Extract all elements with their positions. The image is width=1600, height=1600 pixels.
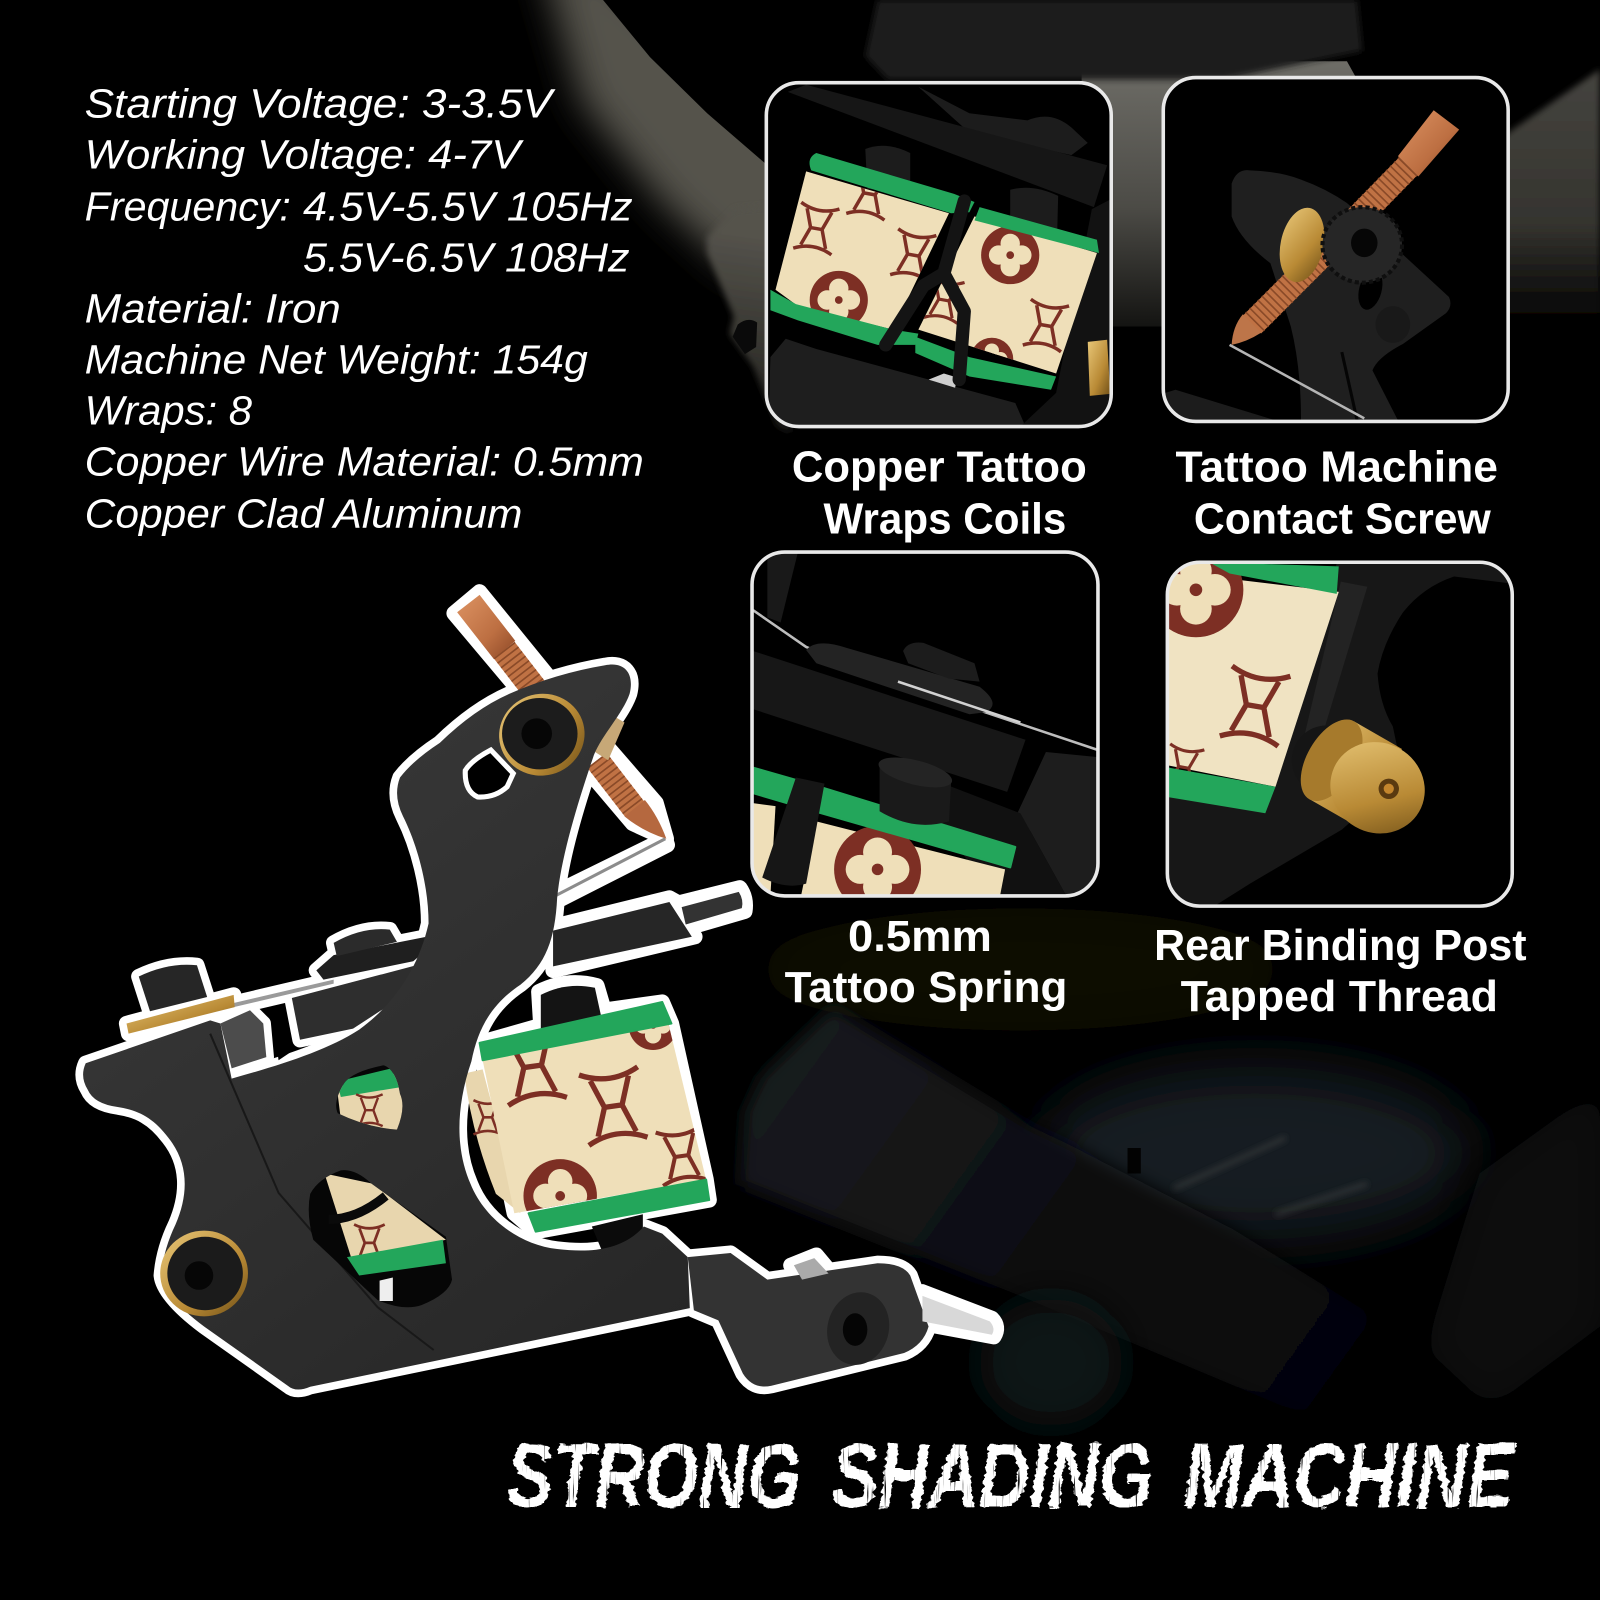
heat-shrink wire <box>886 201 964 380</box>
panel captions: 0.5mm <box>848 912 992 961</box>
armature bar and clamp <box>753 643 1026 792</box>
title: strong shading machine: SHADING <box>832 1425 1153 1527</box>
rear clamp screw and brass washer <box>127 965 266 1068</box>
panel captions: Tattoo Spring <box>785 963 1067 1012</box>
back coil strip <box>464 1069 520 1213</box>
specifications text: Wraps: 8 <box>85 387 252 433</box>
specifications text: 5.5V-6.5V 108Hz <box>303 234 630 280</box>
specifications text: Working Voltage: 4-7V <box>85 131 524 177</box>
specifications text: Frequency: <box>85 183 291 229</box>
frame top screw <box>490 684 594 785</box>
main tattoo machine illustration <box>83 592 997 1390</box>
cream coil with marks <box>1169 564 1339 814</box>
panel: 0.5mm tattoo spring <box>750 550 1100 898</box>
copper contact screw <box>457 595 666 896</box>
specifications text: Copper Wire Material: 0.5mm <box>85 439 644 485</box>
frame pivot screw <box>160 1231 248 1316</box>
title: strong shading machine: MACHINE <box>1184 1425 1516 1527</box>
panel captions: Tattoo Machine <box>1176 443 1498 492</box>
right coil <box>915 188 1099 390</box>
specifications text: Copper Clad Aluminum <box>85 491 522 537</box>
tail bracket <box>688 1253 993 1387</box>
specifications text: 4.5V-5.5V 105Hz <box>303 183 633 229</box>
specifications text <box>85 80 644 537</box>
lower frame window <box>306 1168 454 1311</box>
brass binding post <box>1300 720 1425 834</box>
panel captions: Copper Tattoo <box>792 443 1087 492</box>
copper contact screw <box>1232 110 1459 345</box>
machine frame <box>83 665 690 1390</box>
panel: tattoo machine contact screw <box>1162 76 1510 424</box>
coil top core <box>541 986 602 1031</box>
background photo <box>541 0 1600 1426</box>
machine frame top <box>1232 170 1450 420</box>
specifications text: Starting Voltage: 3-3.5V <box>85 80 556 126</box>
panel captions: Tapped Thread <box>1181 972 1498 1021</box>
specifications text: Material: Iron <box>85 285 341 331</box>
title: strong shading machine: STRONG <box>507 1425 801 1527</box>
specifications text: Machine Net Weight: 154g <box>85 336 588 382</box>
upper frame window <box>336 1065 402 1130</box>
front clamp screw <box>234 929 434 1007</box>
panel: rear binding post tapped thread <box>1166 560 1514 908</box>
panel captions: Rear Binding Post <box>1154 921 1527 970</box>
panel captions: Wraps Coils <box>823 495 1066 544</box>
spring line <box>1230 345 1364 418</box>
panel captions <box>785 443 1527 1021</box>
title: strong shading machine <box>507 1425 1516 1527</box>
panel captions: Contact Screw <box>1194 495 1492 544</box>
main coil with wraps <box>480 1001 709 1233</box>
left coil <box>770 146 974 345</box>
spring coil detail <box>754 758 1016 894</box>
armature bar <box>292 892 742 1040</box>
panel: copper tattoo wraps coils <box>764 80 1113 428</box>
frame hole near top <box>465 750 513 797</box>
